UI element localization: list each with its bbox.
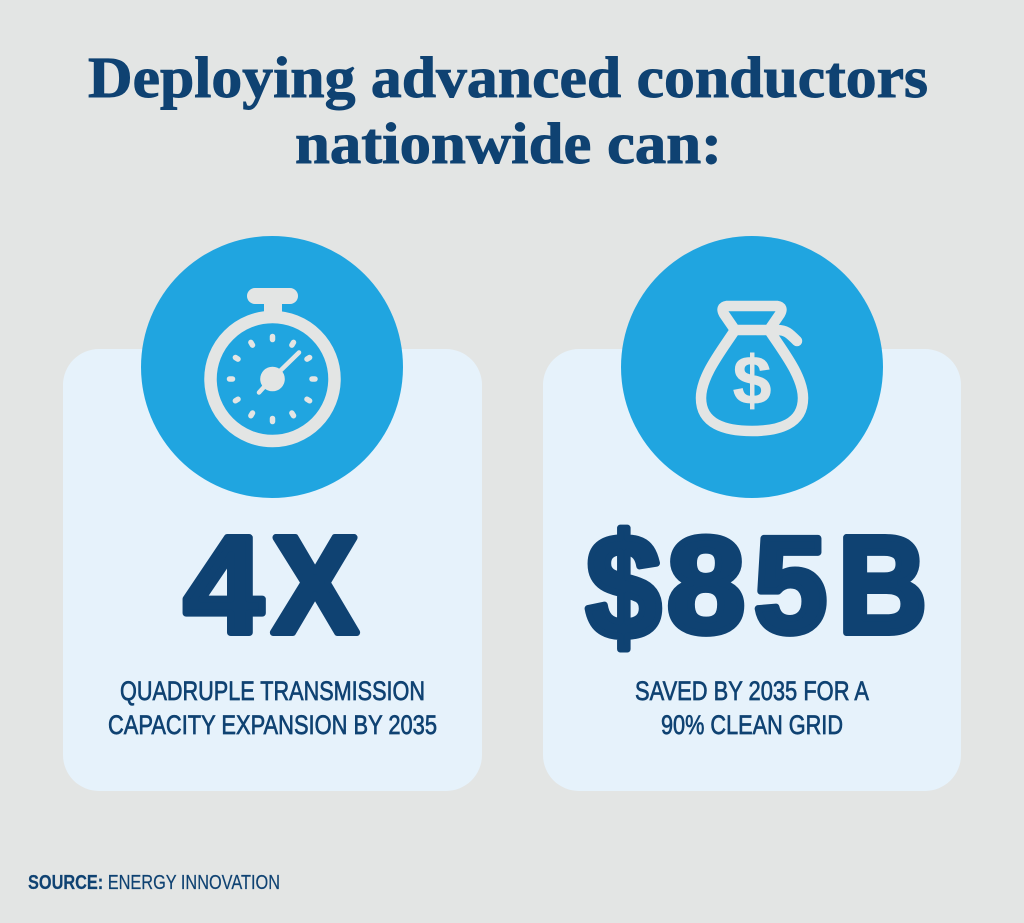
label: savings bbox=[635, 676, 869, 740]
label: capacity: QUADRUPLE TRANSMISSION bbox=[120, 676, 425, 706]
label: savings: 90% CLEAN GRID bbox=[661, 710, 843, 740]
big number: 4X: 4 bbox=[184, 508, 263, 662]
source: SOURCE: ENERGY INNOVATION bbox=[28, 872, 280, 894]
card background bbox=[63, 349, 482, 791]
title: Deploying advanced conductors bbox=[88, 45, 928, 110]
dollar sign: $ bbox=[733, 342, 771, 419]
panel: savings bbox=[543, 236, 961, 791]
big number: $85B: B bbox=[838, 508, 927, 662]
label: savings: SAVED BY 2035 FOR A bbox=[635, 676, 869, 706]
label: capacity: CAPACITY EXPANSION BY 2035 bbox=[108, 710, 437, 740]
icon: stopwatch bbox=[141, 236, 403, 498]
label: capacity bbox=[108, 676, 437, 740]
card background bbox=[543, 349, 961, 791]
big number: $85B bbox=[586, 505, 927, 670]
big number: 4X: X bbox=[272, 508, 358, 662]
panel: capacity bbox=[63, 236, 482, 791]
icon: money bag bbox=[621, 236, 883, 498]
title: nationwide can: bbox=[295, 111, 722, 176]
big number: $85B: 8 bbox=[667, 509, 745, 661]
big number: $85B: $ bbox=[586, 505, 661, 670]
big number: 4X bbox=[184, 508, 358, 662]
big number: $85B: 5 bbox=[754, 509, 827, 661]
title bbox=[88, 45, 928, 176]
